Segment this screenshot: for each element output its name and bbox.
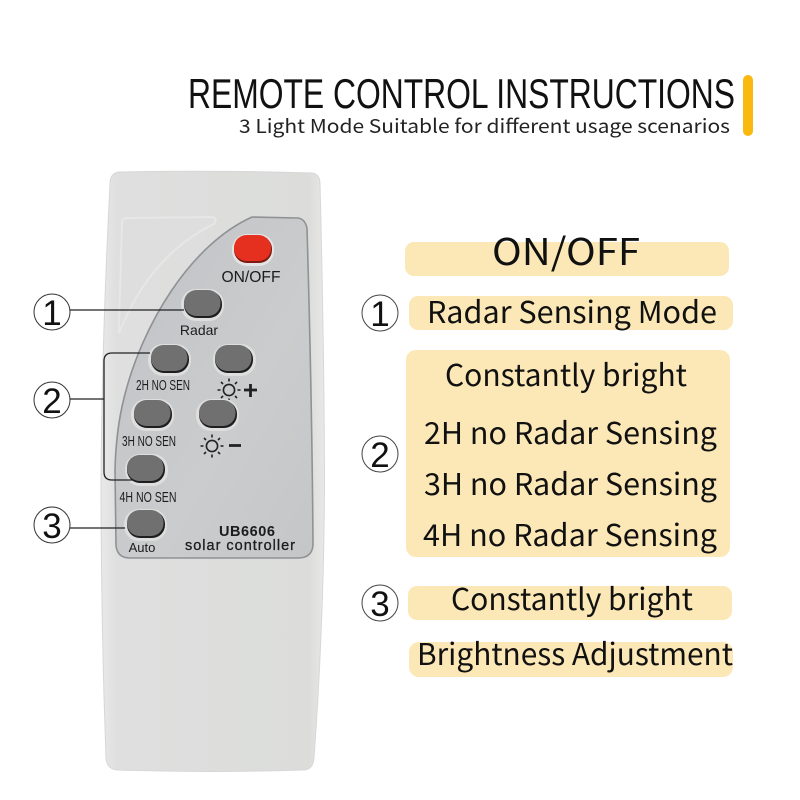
label: 3H no sensing: 3H NO SEN xyxy=(122,433,176,450)
right marker 2 xyxy=(362,436,398,475)
label: solar controller: solar controller xyxy=(185,538,295,554)
text: 3H: 3H no Radar Sensing xyxy=(424,460,717,504)
button: brightness up xyxy=(213,344,256,376)
right marker 2: 2 xyxy=(370,436,390,475)
right marker 3: 3 xyxy=(370,585,390,624)
button: radar xyxy=(181,289,224,321)
label: auto: Auto xyxy=(129,540,155,555)
recessed outline xyxy=(119,217,216,333)
callout line 1 xyxy=(70,309,184,311)
label: 4H no sensing: 4H NO SEN xyxy=(120,489,176,506)
left marker 2 xyxy=(34,382,70,421)
icon: brightness down xyxy=(200,434,241,458)
label: model: UB6606 xyxy=(219,524,275,540)
label: on/off: ON/OFF xyxy=(222,269,280,286)
right marker 1 xyxy=(362,295,398,334)
panel: on/off: ON/OFF xyxy=(492,222,640,276)
text: 4H: 4H no Radar Sensing xyxy=(423,511,717,555)
button: auto xyxy=(124,509,167,541)
button: 2H no sensing xyxy=(148,344,191,376)
grey control panel xyxy=(115,217,313,558)
remote body xyxy=(101,171,324,771)
callout bracket 2 xyxy=(70,353,150,480)
left marker 2: 2 xyxy=(42,382,62,421)
button: on/off xyxy=(232,234,274,266)
panel: constantly bright timers xyxy=(406,350,730,557)
left marker 1: 1 xyxy=(42,294,62,333)
icon: brightness up xyxy=(218,378,257,402)
button: 3H no sensing xyxy=(131,399,174,431)
button: brightness down xyxy=(196,399,239,431)
text: 2H: 2H no Radar Sensing xyxy=(424,409,717,453)
panel: brightness adjustment: Brightness Adjustment xyxy=(417,630,733,674)
button: 4H no sensing xyxy=(125,454,168,486)
panel: constantly bright: Constantly bright xyxy=(451,575,693,619)
left marker 3 xyxy=(34,507,70,546)
left marker 1 xyxy=(34,294,70,333)
label: radar: Radar xyxy=(180,322,218,338)
label: 2H no sensing: 2H NO SEN xyxy=(136,377,190,394)
callout line 3 xyxy=(70,527,125,529)
right marker 1: 1 xyxy=(370,295,390,334)
title accent bar xyxy=(743,75,753,136)
subtitle: 3 Light Mode Suitable for different usage scenarios xyxy=(239,112,730,139)
panel: on/off xyxy=(405,222,729,276)
right marker 3 xyxy=(362,585,398,624)
text: constantly bright: Constantly bright xyxy=(445,351,687,395)
remote control xyxy=(101,171,324,771)
left marker 3: 3 xyxy=(42,507,62,546)
panel: radar sensing mode: Radar Sensing Mode xyxy=(427,288,717,332)
